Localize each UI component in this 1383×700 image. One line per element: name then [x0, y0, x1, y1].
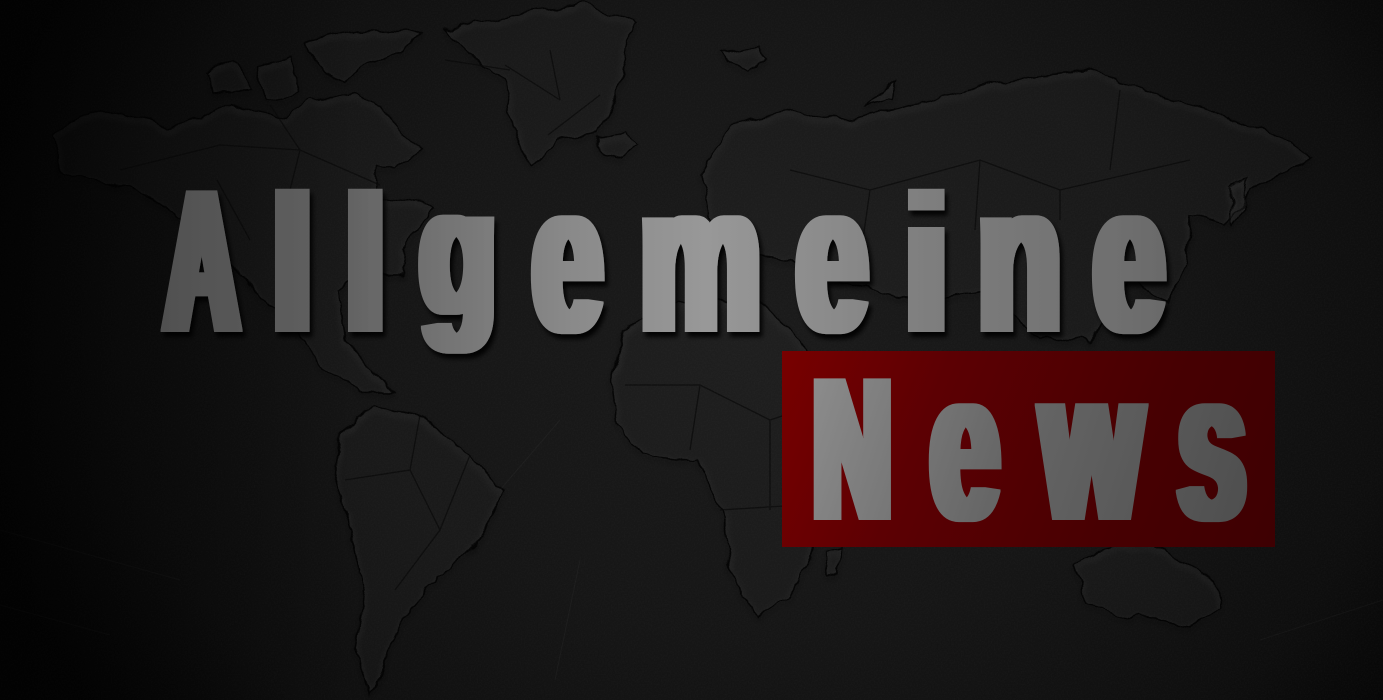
- heading: Allgemeine: [160, 188, 1170, 360]
- red news box: [782, 351, 1275, 547]
- heading: News: [814, 378, 1248, 522]
- left edge vignette: [0, 0, 360, 700]
- map cracks: [120, 50, 1190, 590]
